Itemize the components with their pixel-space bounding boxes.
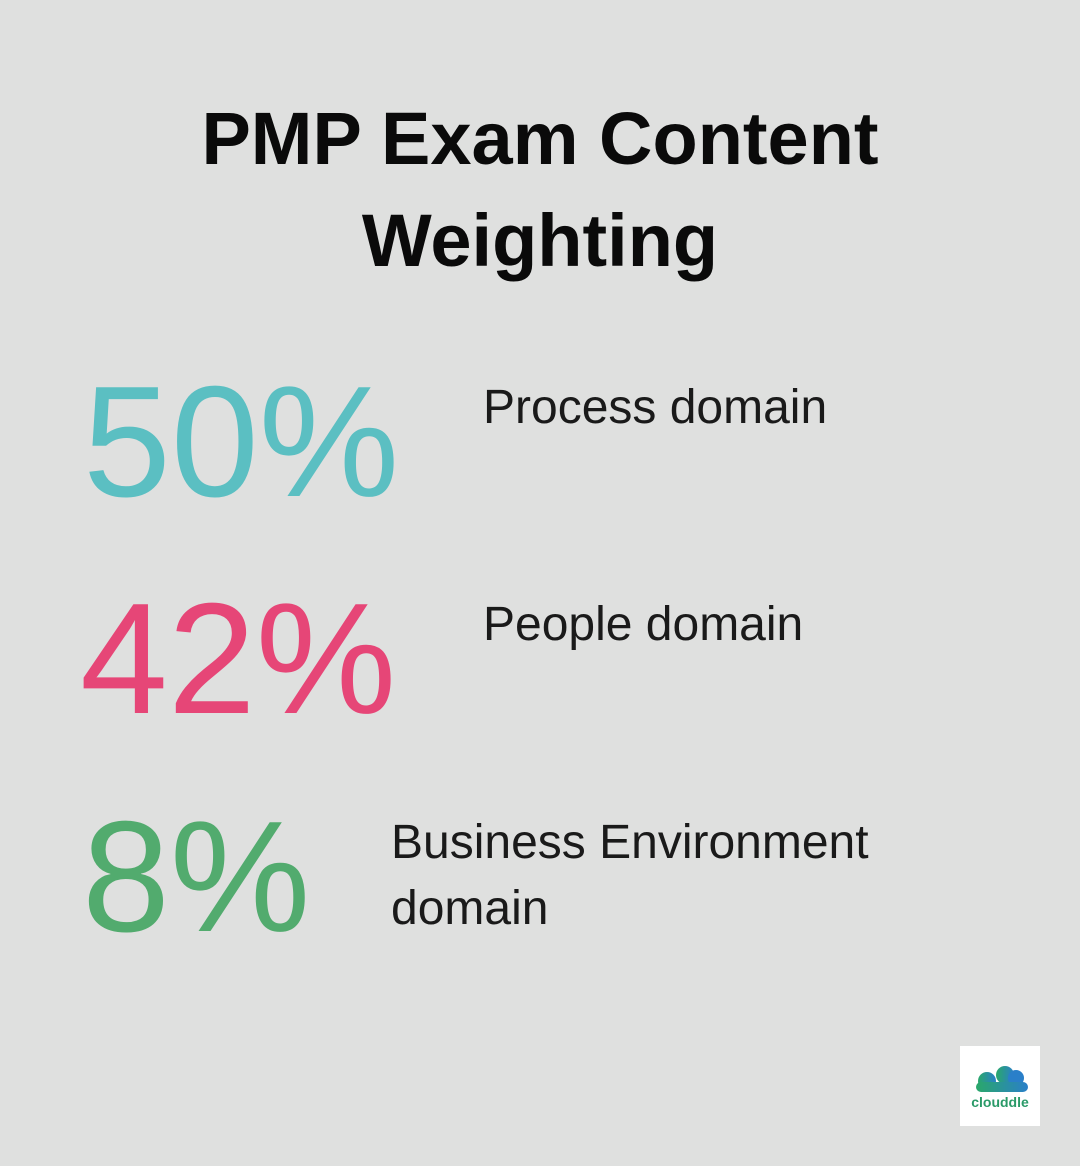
label: process: Process domain (483, 381, 827, 434)
stat: 50%: 50% (83, 354, 399, 530)
logo: clouddle (971, 1094, 1029, 1110)
title (201, 97, 879, 282)
title: Weighting (362, 199, 718, 282)
logo (960, 1046, 1040, 1126)
label: people: People domain (483, 598, 803, 651)
title: PMP Exam Content (201, 97, 879, 180)
stat: 8%: 8% (82, 789, 310, 965)
label: business: Business Environment (391, 816, 869, 869)
stat: 42%: 42% (80, 571, 396, 747)
label: business (391, 816, 869, 935)
label: business: domain (391, 882, 548, 935)
